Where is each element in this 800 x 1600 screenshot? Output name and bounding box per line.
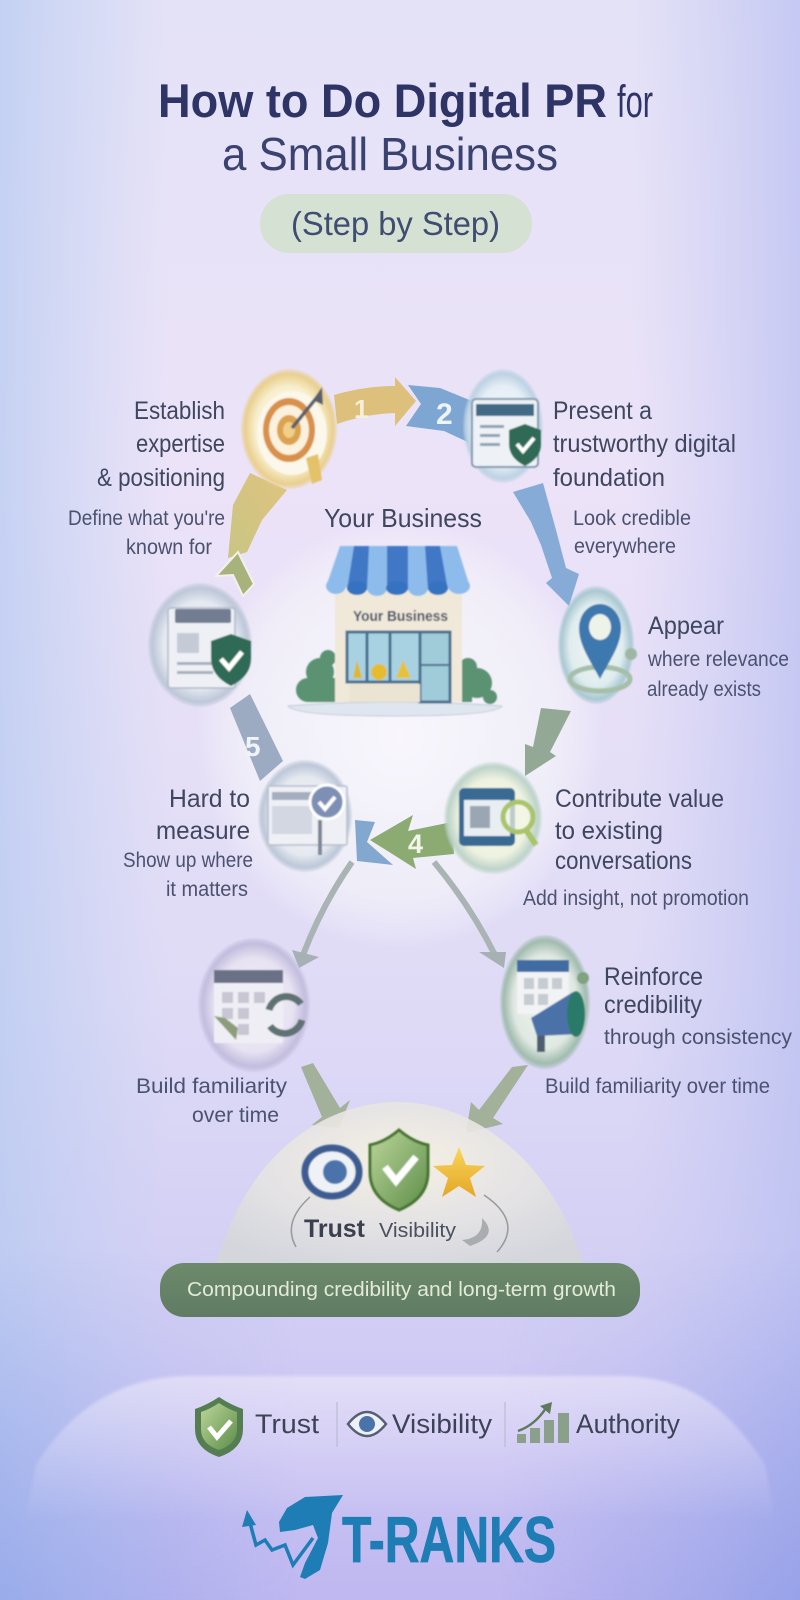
divider bbox=[336, 1402, 338, 1447]
step 2 text: foundation bbox=[553, 464, 665, 492]
arrow 1: 1 bbox=[354, 394, 368, 424]
step 1 text: & positioning bbox=[97, 464, 225, 492]
legend: authority: Authority bbox=[576, 1409, 680, 1439]
step 4 text: Contribute value bbox=[555, 785, 724, 813]
outcome hill: Visibility bbox=[379, 1220, 456, 1242]
step 2 text bbox=[553, 397, 736, 558]
arrow 2 bbox=[406, 385, 472, 444]
step 2 text: everywhere bbox=[574, 535, 676, 558]
icon: document with shield bbox=[148, 583, 252, 707]
building bbox=[335, 590, 462, 702]
icon: hard to measure report bbox=[258, 760, 352, 872]
icon: star bbox=[433, 1147, 485, 1197]
arrow up to step 1 bbox=[216, 473, 287, 596]
growth banner bbox=[160, 1263, 640, 1317]
outcome hill: Trust bbox=[304, 1215, 366, 1243]
step 4 text: to existing bbox=[555, 817, 663, 845]
icon: location pin bbox=[558, 586, 637, 704]
icon: moon bbox=[462, 1218, 489, 1246]
title: a Small Business bbox=[222, 128, 558, 180]
centre glow bbox=[195, 520, 605, 950]
icon: calendar with megaphone bbox=[500, 935, 590, 1069]
lower connector arrows bbox=[292, 862, 528, 1133]
icon: trustworthy page bbox=[463, 369, 543, 483]
arrow 1 bbox=[334, 377, 416, 426]
step 3 text bbox=[647, 612, 789, 701]
build familiarity text bbox=[136, 1075, 288, 1127]
icon: target bbox=[241, 369, 337, 489]
step 1 text: Establish bbox=[134, 397, 225, 425]
step 1 text: Define what you're bbox=[68, 507, 225, 530]
divider bbox=[504, 1402, 506, 1447]
legend: authority bbox=[517, 1402, 680, 1443]
reinforce text: through consistency bbox=[604, 1026, 792, 1049]
step 1 text: expertise bbox=[136, 430, 225, 458]
centre label: Your Business bbox=[324, 503, 482, 533]
brackets bbox=[291, 1195, 508, 1252]
T-RANKS logo: T-RANKS bbox=[342, 1503, 556, 1576]
reinforce text: Build familiarity over time bbox=[545, 1075, 770, 1098]
subtitle pill: (Step by Step) bbox=[291, 205, 500, 242]
subtitle pill bbox=[260, 194, 532, 253]
step 1 text: known for bbox=[126, 536, 212, 559]
build familiarity text: over time bbox=[192, 1104, 279, 1127]
icon: contribute screen with magnifier bbox=[444, 762, 542, 874]
outcome hill bbox=[214, 1102, 586, 1275]
icon: calendar with refresh bbox=[198, 938, 310, 1072]
step 4 text: Add insight, not promotion bbox=[523, 887, 749, 910]
title: for bbox=[617, 76, 653, 127]
arrow 2: 2 bbox=[436, 398, 453, 431]
step 2 text: Present a bbox=[553, 397, 652, 425]
legend: visibility bbox=[348, 1409, 493, 1439]
icon: shield bbox=[370, 1130, 428, 1210]
bottom band bbox=[25, 1376, 775, 1520]
bushes bbox=[296, 650, 497, 704]
icon: dinosaur head bbox=[279, 1495, 343, 1579]
step 5 text bbox=[123, 785, 253, 901]
step 3 text: Appear bbox=[648, 612, 724, 640]
reinforce text bbox=[545, 963, 792, 1098]
arrow 3 to 4 bbox=[525, 708, 571, 776]
growth banner: Compounding credibility and long-term growth bbox=[187, 1278, 616, 1301]
step 5 text: measure bbox=[156, 817, 250, 845]
step 1 text bbox=[68, 397, 225, 559]
reinforce text: credibility bbox=[604, 991, 702, 1019]
arrow 2 to 3 bbox=[513, 483, 579, 606]
step 3 text: already exists bbox=[647, 678, 761, 701]
step 2 text: Look credible bbox=[573, 507, 691, 530]
step 4 text: conversations bbox=[555, 847, 692, 875]
arrow 5 bbox=[230, 694, 283, 781]
storefront bbox=[288, 546, 502, 716]
icon: growth zigzag arrow bbox=[242, 1510, 313, 1565]
step 4 text bbox=[523, 785, 749, 910]
step 5 text: it matters bbox=[166, 878, 248, 901]
build familiarity text: Build familiarity bbox=[136, 1075, 288, 1098]
step 2 text: trustworthy digital bbox=[553, 430, 736, 458]
step 3 text: where relevance bbox=[647, 648, 789, 671]
reinforce text: Reinforce bbox=[604, 963, 703, 991]
arrow 4: 4 bbox=[408, 829, 423, 859]
awning bbox=[326, 546, 470, 596]
storefront: Your Business bbox=[353, 608, 448, 625]
arrow 4 bbox=[355, 815, 454, 869]
T-RANKS logo bbox=[242, 1495, 556, 1579]
legend: visibility: Visibility bbox=[392, 1409, 493, 1439]
step 5 text: Hard to bbox=[169, 785, 250, 813]
ring arrows bbox=[216, 377, 579, 869]
base bbox=[288, 702, 502, 716]
legend: trust bbox=[195, 1397, 320, 1457]
icon: eye bbox=[305, 1148, 359, 1196]
step 5 text: Show up where bbox=[123, 849, 253, 872]
legend: trust: Trust bbox=[255, 1409, 320, 1439]
title: How to Do Digital PR bbox=[158, 74, 607, 127]
arrow 5: 5 bbox=[245, 731, 261, 762]
title bbox=[158, 74, 653, 180]
